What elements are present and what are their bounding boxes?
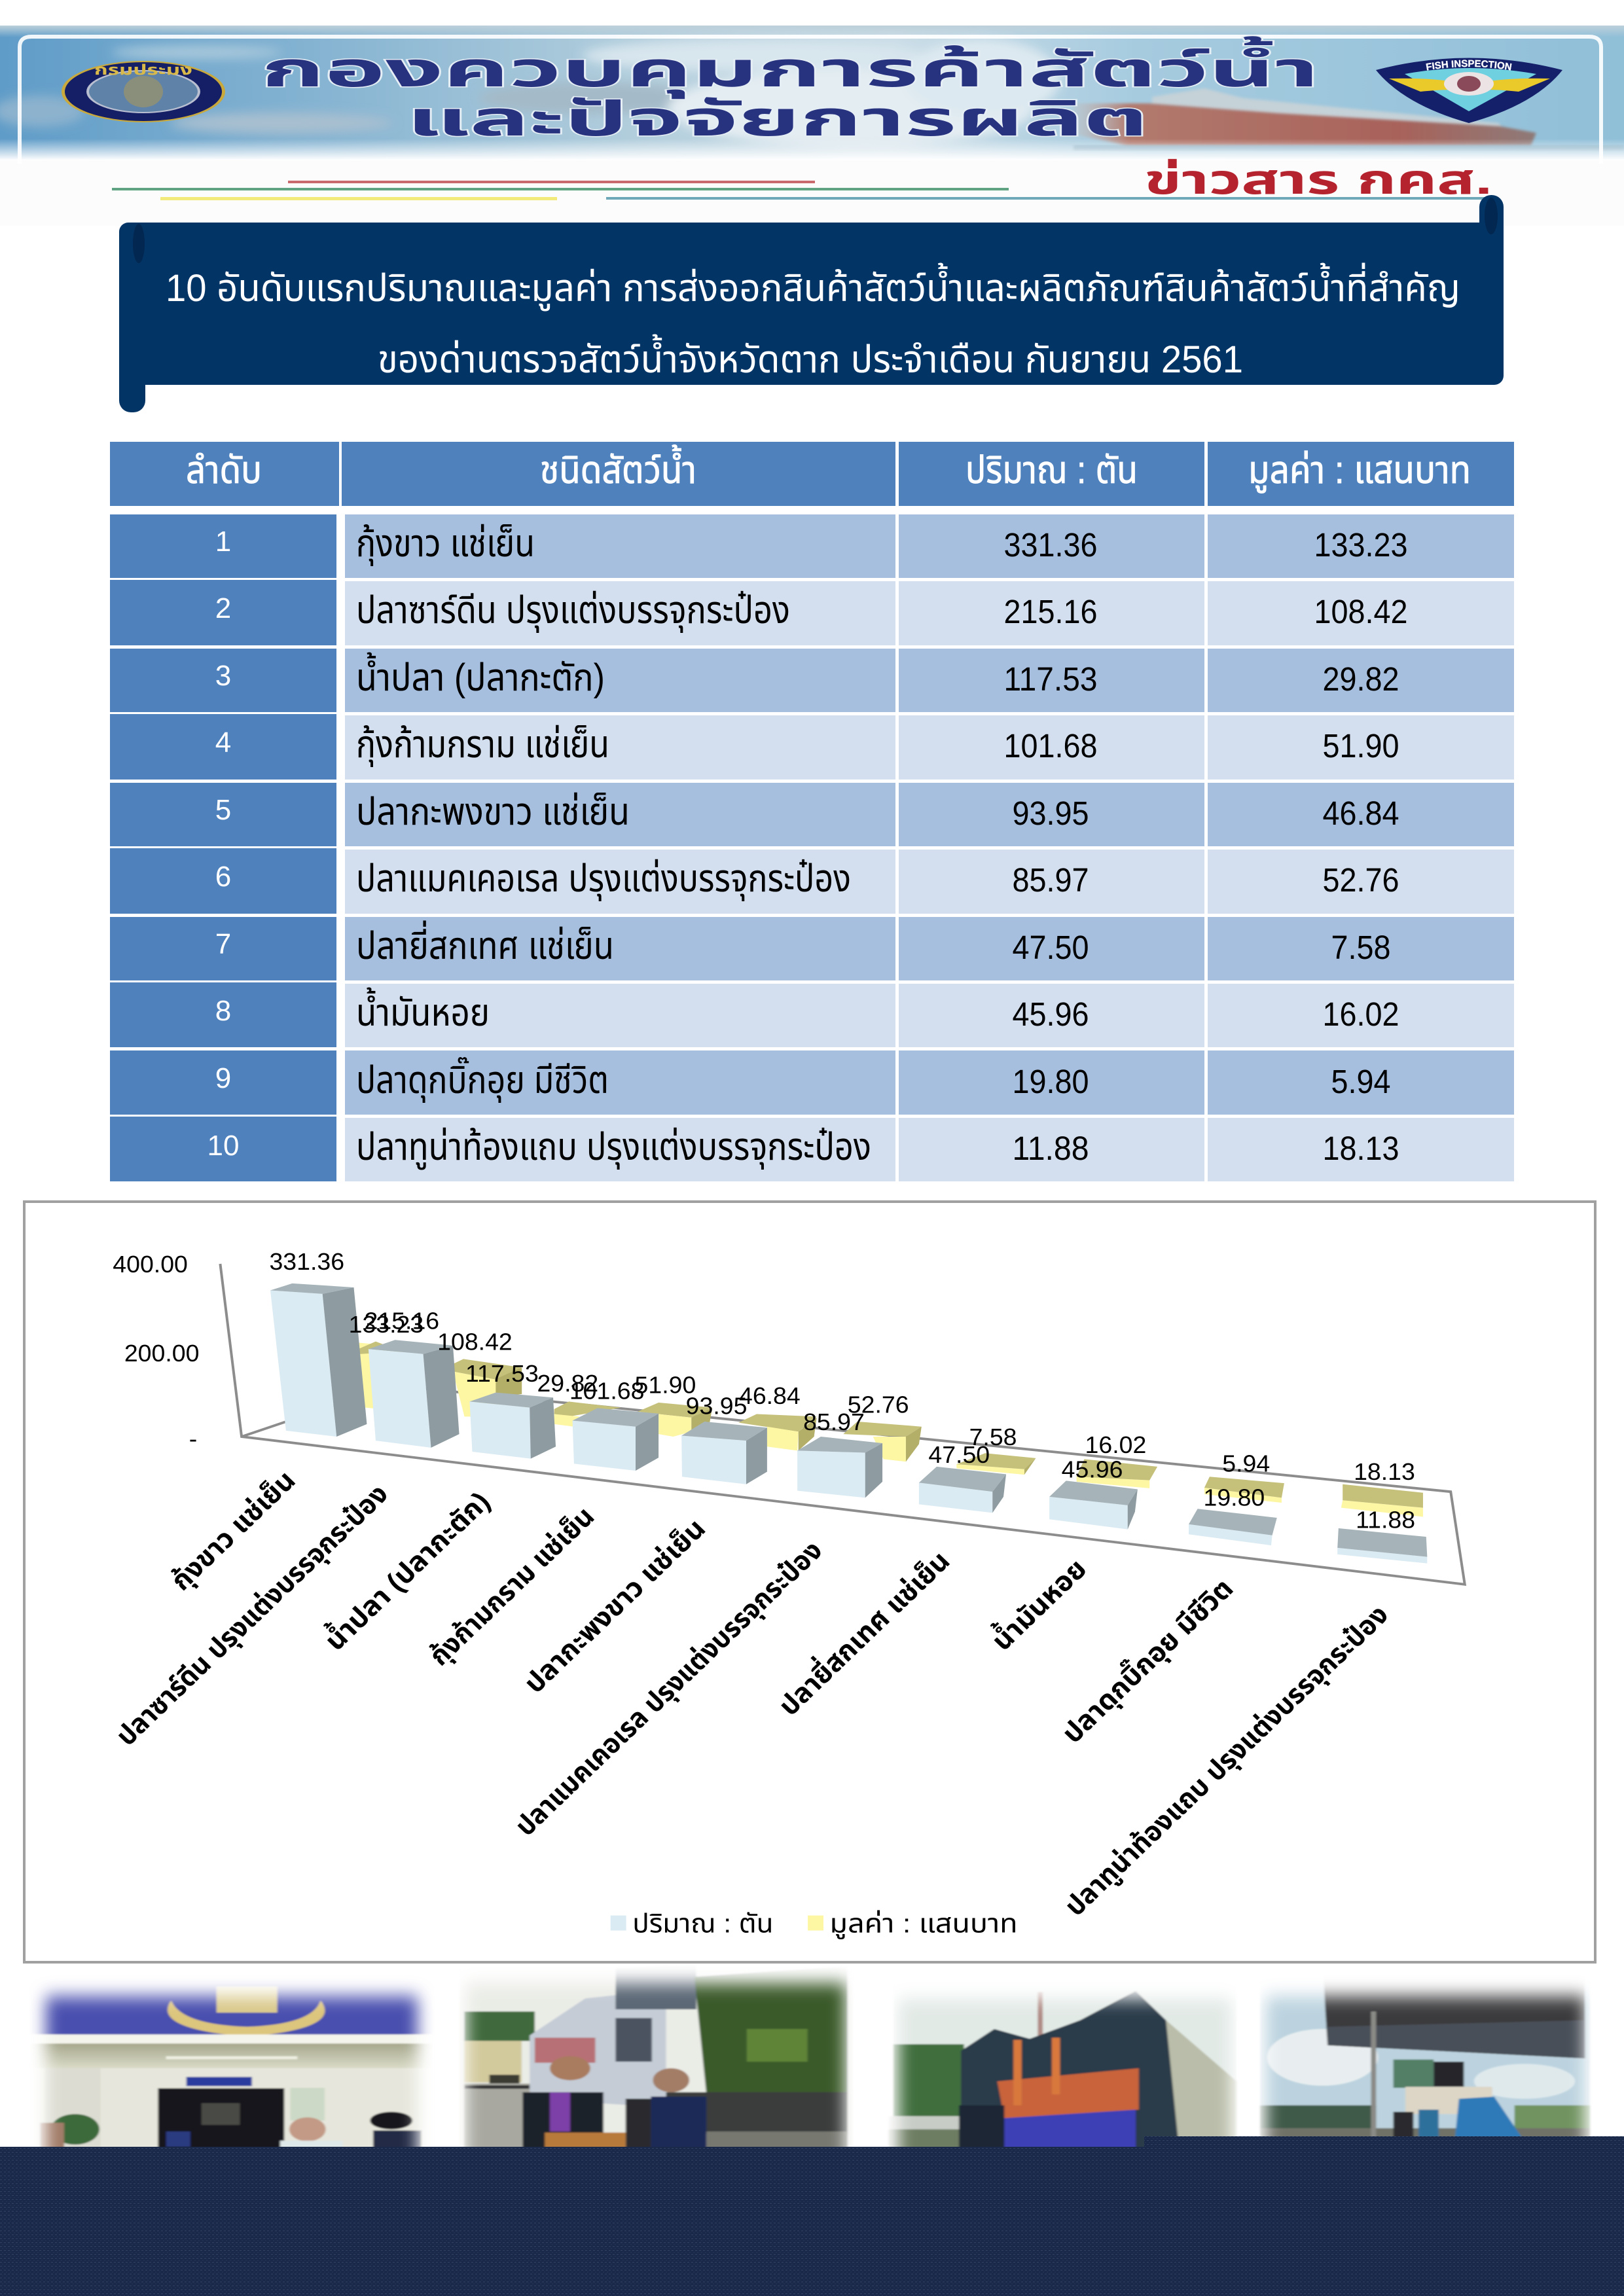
row 3: น้ำปลา (ปลากะตัก) [356, 652, 605, 699]
row 5: 46.84 [1322, 795, 1399, 832]
row 10: 18.13 [1322, 1130, 1399, 1167]
row 7: ปลายี่สกเทศ แช่เย็น [356, 920, 614, 967]
row 5: 93.95 [1012, 795, 1089, 832]
row 8 [110, 982, 1514, 1047]
ribbon fold shading [133, 224, 145, 263]
data labels left half: 101.68 [569, 1378, 644, 1404]
chart right half bars: 16.02 [1085, 1432, 1146, 1458]
banner: department seal left [62, 61, 225, 122]
data labels left half: 117.53 [465, 1360, 539, 1387]
chart right half bars: 47.50 [928, 1441, 990, 1468]
chart right half bars: 52.76 [848, 1391, 909, 1418]
row 7 [110, 917, 1514, 980]
row 1: กุ้งขาว แช่เย็น [356, 522, 535, 566]
y axis labels: 400.00 [113, 1251, 188, 1278]
row 3: 29.82 [1322, 660, 1399, 698]
chart right half bars: 18.13 [1354, 1458, 1415, 1485]
row 8: 16.02 [1322, 996, 1399, 1033]
row 6 [110, 848, 1514, 914]
row 9 [110, 1050, 1514, 1115]
category labels rotated: น้ำปลา (ปลากะตัก) [316, 1483, 496, 1656]
data labels left half: 29.82 [537, 1371, 598, 1397]
banner: header image [0, 26, 1624, 160]
photo strip [29, 1964, 1590, 2160]
row 10: ปลาทูน่าท้องแถบ ปรุงแต่งบรรจุกระป๋อง [356, 1126, 871, 1170]
chart right half bars: 11.88 [1356, 1507, 1415, 1533]
y axis labels: - [189, 1426, 197, 1452]
banner: heading line 2: และปัจจัยการผลิต [406, 92, 1148, 146]
banner: heading line 1: กองควบคุมการค้าสัตว์น้ำ [261, 36, 1319, 99]
table header row: ชนิดสัตว์น้ำ [540, 444, 696, 492]
data labels left half: 108.42 [437, 1329, 513, 1355]
row 4: กุ้งก้ามกราม แช่เย็น [356, 723, 609, 767]
title ribbon [119, 195, 1504, 412]
data labels left half: 46.84 [739, 1383, 801, 1409]
row 2: ปลาซาร์ดีน ปรุงแต่งบรรจุกระป๋อง [356, 589, 790, 633]
row 6: 6 [215, 861, 231, 893]
category labels rotated: กุ้งขาว แช่เย็น [165, 1465, 302, 1597]
row 8: น้ำมันหอย [356, 987, 490, 1034]
row 10 [110, 1117, 1514, 1181]
category labels rotated: ปลากะพงขาว แช่เย็น [518, 1513, 712, 1698]
category labels rotated: กุ้งก้ามกราม แช่เย็น [423, 1501, 601, 1672]
chart right half bars: 7.58 [969, 1424, 1017, 1450]
category labels rotated: ปลาซาร์ดีน ปรุงแต่งบรรจุกระป๋อง [110, 1479, 395, 1752]
row 1 [110, 514, 1514, 578]
row 2 [110, 580, 1514, 645]
table header row: มูลค่า : แสนบาท [1248, 449, 1471, 493]
title line 2: ของด่านตรวจสัตว์น้ำจังหวัดตาก ประจำเดือน กันยายน 2561 [378, 334, 1243, 381]
row 4: 101.68 [1004, 727, 1097, 764]
table header row: ปริมาณ : ตัน [965, 449, 1138, 492]
row 10: 10 [208, 1130, 239, 1162]
decorative colour lines [112, 181, 1491, 200]
chart axes and floor [220, 1264, 1465, 1585]
data labels left half [269, 1249, 801, 1419]
chart legend: มูลค่า : แสนบาท [830, 1909, 1018, 1939]
footer band [0, 2136, 1624, 2296]
row 2: 2 [215, 592, 231, 624]
category labels rotated [110, 1465, 1396, 1922]
category labels rotated: ปลาทูน่าท้องแถบ ปรุงแต่งบรรจุกระป๋อง [1058, 1599, 1396, 1922]
row 5 [110, 783, 1514, 846]
banner: ship hull [1074, 103, 1536, 145]
row 10: 11.88 [1012, 1130, 1089, 1167]
row 3 [110, 649, 1514, 712]
y axis labels: 200.00 [124, 1340, 199, 1367]
row 6: 85.97 [1012, 861, 1089, 899]
row 4: 4 [215, 726, 231, 759]
photo: loaded truck with tarpaulin [888, 1991, 1237, 2147]
data labels left half: 133.23 [349, 1311, 424, 1338]
data labels left half: 93.95 [686, 1393, 747, 1419]
data labels left half: 215.16 [365, 1308, 439, 1334]
row 7: 7.58 [1331, 929, 1390, 966]
chart right half bars [797, 1391, 1427, 1564]
row 9: 19.80 [1012, 1063, 1089, 1100]
chart right half bars: 85.97 [803, 1409, 865, 1435]
banner: ship deck [1152, 88, 1502, 130]
row 6: ปลาแมคเคอเรล ปรุงแต่งบรรจุกระป๋อง [356, 857, 851, 901]
row 4 [110, 714, 1514, 780]
row 7: 7 [215, 928, 231, 960]
row 3: 117.53 [1004, 660, 1097, 698]
category labels rotated: ปลายี่สกเทศ แช่เย็น [770, 1543, 956, 1721]
chart right half bars: 19.80 [1204, 1484, 1265, 1511]
photo: truck with officers [459, 1964, 853, 2153]
row 9: 9 [215, 1062, 231, 1094]
data labels left half: 331.36 [269, 1249, 344, 1275]
row 9: ปลาดุกบิ๊กอุย มีชีวิต [356, 1056, 609, 1103]
row 3: 3 [215, 660, 231, 692]
row 1: 331.36 [1004, 526, 1097, 564]
row 5: 5 [215, 794, 231, 826]
data table [110, 442, 1514, 1181]
row 5: ปลากะพงขาว แช่เย็น [356, 791, 630, 833]
blue volume series [270, 1283, 767, 1484]
data labels left half: 51.90 [635, 1372, 696, 1398]
row 2: 108.42 [1314, 593, 1407, 630]
banner: fish inspection shield right: FISH INSPECTION [1426, 60, 1512, 71]
row 4: 51.90 [1322, 727, 1399, 764]
banner: fish inspection shield right [1376, 58, 1562, 123]
category labels rotated: ปลาดุกบิ๊กอุย มีชีวิต [1055, 1571, 1240, 1749]
yellow value series [344, 1342, 817, 1450]
chart panel: 3D column chart [24, 1202, 1595, 1962]
ribbon curl bottom left [119, 226, 145, 412]
table header row [110, 442, 1514, 506]
category labels rotated: น้ำมันหอย [983, 1551, 1092, 1656]
banner: white rounded frame [20, 37, 1601, 164]
chart right half bars: 5.94 [1222, 1450, 1270, 1477]
y axis labels [113, 1251, 199, 1452]
row 1: 1 [215, 526, 231, 558]
banner: department seal left: กรมประมง [94, 62, 192, 78]
category labels rotated: ปลาแมคเคอเรล ปรุงแต่งบรรจุกระป๋อง [509, 1535, 829, 1842]
row 7: 47.50 [1012, 929, 1089, 966]
chart legend [611, 1909, 1018, 1939]
row 8: 45.96 [1012, 996, 1089, 1033]
row 6: 52.76 [1322, 861, 1399, 899]
banner: sea line [1074, 145, 1624, 151]
title line 1: 10 อันดับแรกปริมาณและมูลค่า การส่งออกสินค้าสัตว์น้ำและผลิตภัณฑ์สินค้าสัตว์น้ำที่สำคัญ [166, 262, 1460, 311]
photo: office building entrance [33, 1982, 431, 2147]
row 2: 215.16 [1004, 593, 1097, 630]
banner: fish and net texture [0, 39, 1060, 147]
row 9: 5.94 [1331, 1063, 1390, 1100]
row 8: 8 [215, 995, 231, 1027]
ribbon curl top right [1479, 195, 1504, 274]
chart right half bars: 45.96 [1062, 1456, 1123, 1483]
row 1: 133.23 [1314, 526, 1407, 564]
newsletter label: ข่าวสาร กคส. [1144, 158, 1492, 203]
chart legend: ปริมาณ : ตัน [632, 1909, 773, 1938]
photo: truck under canopy [1259, 1982, 1591, 2136]
table header row: ลำดับ [186, 449, 262, 492]
